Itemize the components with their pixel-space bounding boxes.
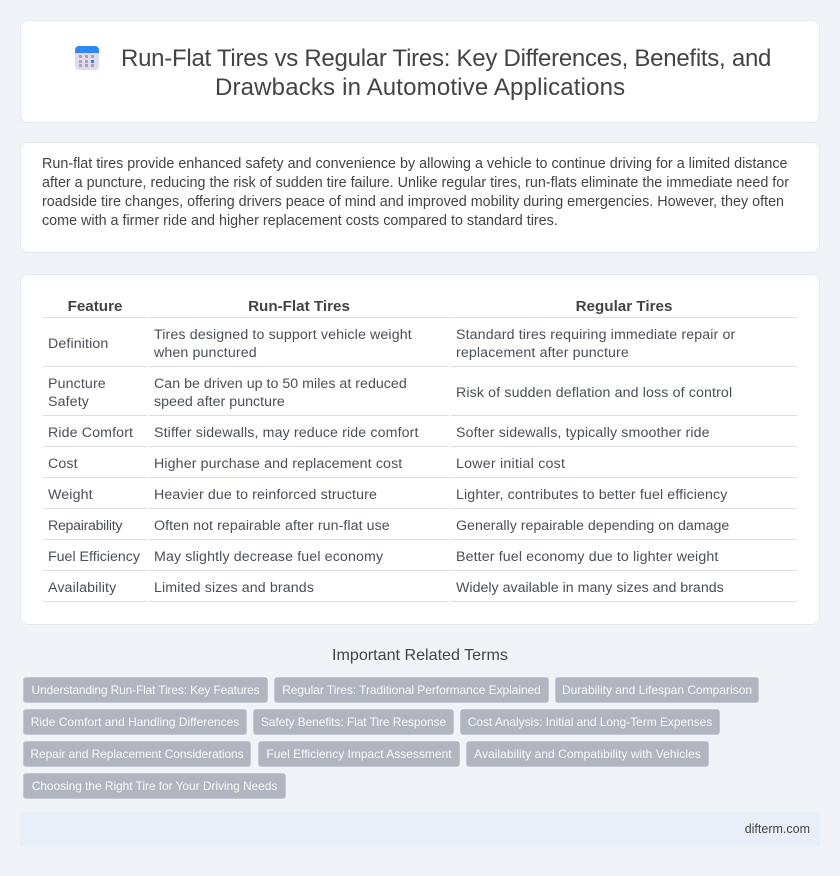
intro text: Run-flat tires provide enhanced safety and convenience by allowing a vehicle to continue driving for a limited distance	[42, 156, 788, 172]
tag	[23, 741, 251, 767]
row: Ride Comfort: Softer sidewalls, typically smoother ride	[456, 425, 710, 441]
row: Puncture Safety: Puncture	[48, 376, 106, 392]
tag: Ride Comfort and Handling Differences	[31, 715, 239, 729]
intro text: roadside tire changes, offering drivers peace of mind and improved mobility during emergencies. However, they often	[42, 194, 784, 210]
row: Puncture Safety: Risk of sudden deflation and loss of control	[456, 385, 732, 401]
row: Definition: Tires designed to support vehicle weight	[154, 327, 412, 343]
tag: Cost Analysis: Initial and Long-Term Expenses	[468, 715, 712, 729]
row: Cost: Cost	[48, 456, 78, 472]
tag	[253, 709, 454, 735]
tag: Fuel Efficiency Impact Assessment	[266, 747, 452, 761]
row: Ride Comfort: Stiffer sidewalls, may reduce ride comfort	[154, 425, 419, 441]
row: Fuel Efficiency	[48, 549, 718, 565]
row: Repairability: Often not repairable after run-flat use	[154, 518, 390, 534]
row: Puncture Safety: speed after puncture	[154, 394, 285, 410]
tag: Choosing the Right Tire for Your Driving Needs	[32, 779, 277, 793]
tag: Understanding Run-Flat Tires: Key Features	[31, 683, 260, 697]
tag	[23, 773, 286, 799]
row: Definition: when punctured	[154, 345, 257, 361]
table header: Feature	[68, 298, 122, 315]
title: Drawbacks in Automotive Applications	[215, 74, 625, 101]
tag	[274, 677, 549, 703]
tag: Regular Tires: Traditional Performance Explained	[282, 683, 541, 697]
row: Availability: Limited sizes and brands	[154, 580, 314, 596]
row: Fuel Efficiency: Better fuel economy due to lighter weight	[456, 549, 718, 565]
row: Availability: Widely available in many sizes and brands	[456, 580, 724, 596]
row: Puncture Safety: Safety	[48, 394, 89, 410]
intro text: come with a firmer ride and higher replacement costs compared to standard tires.	[42, 213, 558, 229]
row: Cost	[48, 456, 565, 472]
row: Definition	[48, 327, 735, 361]
tag: Availability and Compatibility with Vehicles	[474, 747, 701, 761]
tag: Safety Benefits: Flat Tire Response	[261, 715, 446, 729]
tag	[258, 741, 460, 767]
panel: comparison table	[20, 274, 820, 625]
tag	[23, 709, 247, 735]
table header: Regular Tires	[576, 298, 672, 315]
panel: header	[20, 20, 820, 123]
row: Weight: Heavier due to reinforced structure	[154, 487, 377, 503]
row: Ride Comfort: Ride Comfort	[48, 425, 133, 441]
tag: Durability and Lifespan Comparison	[562, 683, 752, 697]
row: Availability: Availability	[48, 580, 116, 596]
row: Weight: Lighter, contributes to better fuel efficiency	[456, 487, 728, 503]
tag	[23, 677, 268, 703]
row: Puncture Safety	[48, 376, 732, 410]
footer text: difterm.com	[745, 822, 810, 836]
table header: Run-Flat Tires	[248, 298, 350, 315]
row: Cost: Lower initial cost	[456, 456, 565, 472]
table header	[68, 298, 672, 315]
row: Definition: replacement after puncture	[456, 345, 629, 361]
row: Repairability: Generally repairable depending on damage	[456, 518, 729, 534]
footer	[20, 812, 820, 846]
tag	[466, 741, 709, 767]
intro text	[42, 156, 789, 229]
row: Definition: Standard tires requiring immediate repair or	[456, 327, 735, 343]
heading: related terms: Important Related Terms	[332, 646, 508, 664]
related terms tags	[23, 677, 759, 799]
row: Repairability	[48, 518, 729, 534]
tag	[460, 709, 720, 735]
row: Weight	[48, 487, 728, 503]
tag	[555, 677, 759, 703]
panel: introduction	[20, 142, 820, 253]
row: Repairability: Repairability	[48, 518, 122, 534]
row: Fuel Efficiency: Fuel Efficiency	[48, 549, 140, 565]
row: Ride Comfort	[48, 425, 710, 441]
title	[121, 45, 771, 101]
intro text: after a puncture, reducing the risk of sudden tire failure. Unlike regular tires, run-flats eliminate the immediate need for	[42, 175, 789, 191]
row: Definition: Definition	[48, 336, 108, 352]
row: Weight: Weight	[48, 487, 93, 503]
row: Cost: Higher purchase and replacement cost	[154, 456, 402, 472]
tag: Repair and Replacement Considerations	[30, 747, 244, 761]
row: Fuel Efficiency: May slightly decrease fuel economy	[154, 549, 383, 565]
title: Run-Flat Tires vs Regular Tires: Key Differences, Benefits, and	[121, 45, 771, 72]
row: Availability	[48, 580, 724, 596]
icon: calendar	[75, 46, 99, 70]
row: Puncture Safety: Can be driven up to 50 miles at reduced	[154, 376, 407, 392]
